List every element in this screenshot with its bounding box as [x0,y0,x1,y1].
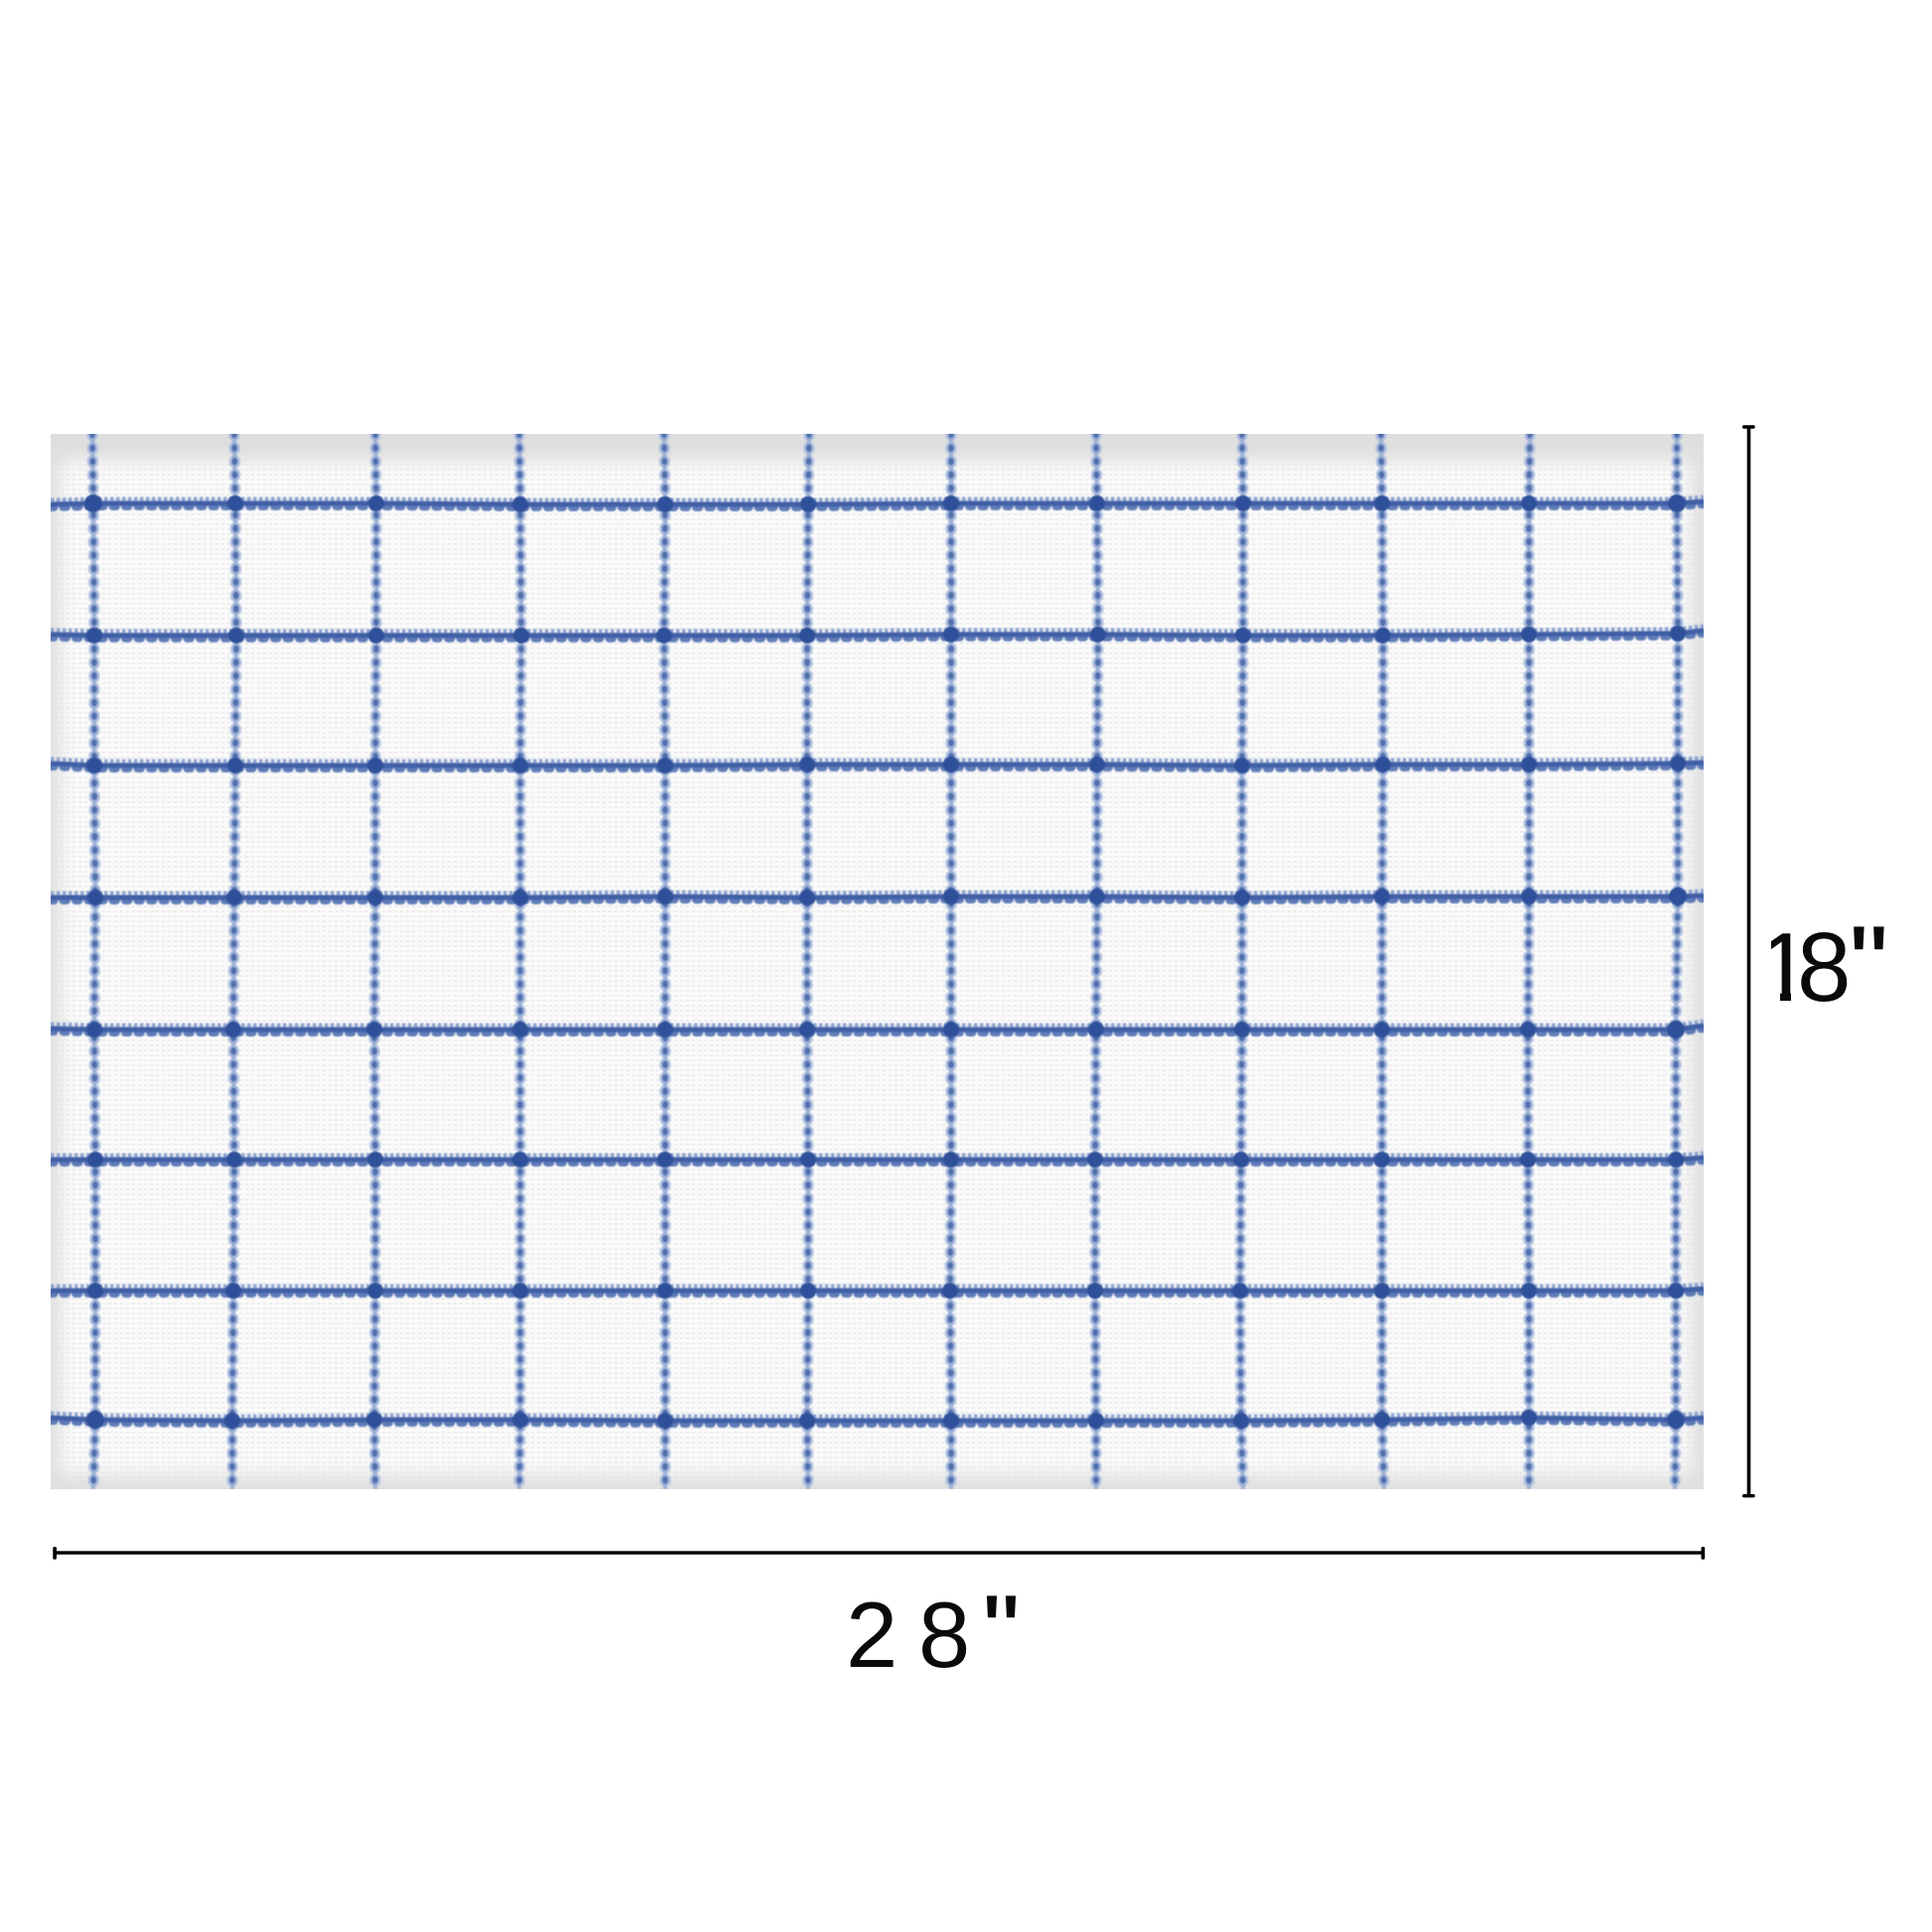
height label [1771,926,1884,1002]
height label: '' [1850,906,1888,1016]
towel fabric [51,434,1704,1489]
width label: 28 [846,1583,970,1687]
width dimension line [53,1547,1705,1560]
towel [51,434,1704,1489]
height label: 1 [1757,912,1812,1022]
width label: '' [983,1577,1020,1681]
horizontal blue stripes [51,497,1704,1424]
vertical blue stripes [92,434,1678,1489]
height label: 8 [1797,912,1852,1022]
stripe crossing knots [84,494,1687,1429]
height dimension line [1742,425,1755,1497]
product dimension diagram [51,425,1884,1668]
